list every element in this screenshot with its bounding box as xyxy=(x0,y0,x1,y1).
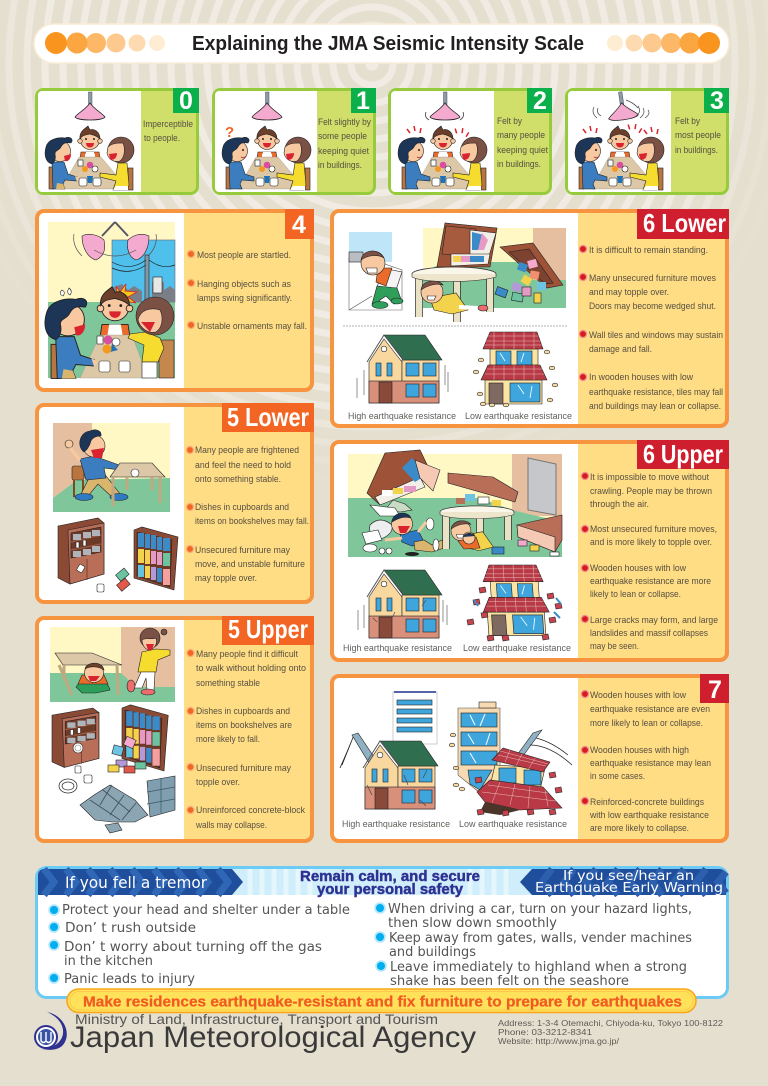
heading: Explaining the JMA Seismic Intensity Scale xyxy=(192,32,584,55)
heading: remain calm: your personal safety xyxy=(317,882,463,898)
icon: left orange dots xyxy=(45,32,165,54)
description bullets: landslides and massif collapses xyxy=(590,628,708,638)
illustration: person thrown, furniture toppled xyxy=(348,450,562,641)
panel: intensity 5 upper xyxy=(37,614,314,841)
description bullets: Wall tiles and windows may sustain xyxy=(589,330,723,340)
description bullets: items on bookshelves are xyxy=(196,720,292,730)
title banner xyxy=(34,24,729,63)
panel: intensity 0 xyxy=(36,87,199,194)
list: early warning xyxy=(374,902,692,989)
badge: 0: 0 xyxy=(179,87,193,115)
panel: intensity 3 xyxy=(566,87,729,194)
illustration: family at table with question mark: ? xyxy=(225,124,234,141)
description bullets: may be seen. xyxy=(590,641,639,651)
list: early warning: Leave immediately to highland when a strong xyxy=(390,960,687,975)
description xyxy=(318,117,371,170)
description bullets: Most people are startled. xyxy=(197,250,291,260)
description: most people xyxy=(675,130,721,140)
text: contact details: Phone: 03-3212-8341 xyxy=(498,1027,592,1037)
description bullets: Wooden houses with low xyxy=(590,563,686,573)
badge: 1: 1 xyxy=(356,87,370,115)
panel: intensity 4 xyxy=(37,209,314,390)
description: Felt slightly by xyxy=(318,117,371,127)
description bullets: Unreinforced concrete-block xyxy=(196,805,305,815)
list: early warning: shake has been felt on the seashore xyxy=(390,974,629,989)
description bullets: to walk without holding onto xyxy=(196,663,306,673)
description bullets xyxy=(579,245,723,411)
description bullets: Unsecured furniture may xyxy=(195,545,290,555)
description: in buildings. xyxy=(497,159,541,169)
panel: safety advice xyxy=(36,868,728,998)
arrow: early warning: Earthquake Early Warning xyxy=(535,880,723,896)
description bullets: topple over. xyxy=(196,777,240,787)
description: in buildings. xyxy=(318,160,362,170)
header band xyxy=(38,868,726,898)
description bullets: Most unsecured furniture moves, xyxy=(590,524,717,534)
description bullets: In wooden houses with low xyxy=(589,372,693,382)
arrow: if you felt a tremor: If you fell a tremor xyxy=(65,873,207,892)
badge: 7: 7 xyxy=(708,676,722,704)
badge: 3: 3 xyxy=(710,87,724,115)
arrow: early warning xyxy=(520,868,726,896)
caption: low resistance: Low earthquake resistance xyxy=(459,819,567,829)
description bullets: It is impossible to move without xyxy=(590,472,709,482)
description: Felt by xyxy=(675,116,700,126)
description bullets: onto something stable. xyxy=(195,474,281,484)
description bullets: earthquake resistance, tiles may fall xyxy=(589,387,723,397)
badge: 7 xyxy=(700,674,729,704)
description bullets xyxy=(187,250,307,331)
description bullets: Dishes in cupboards and xyxy=(195,502,289,512)
description xyxy=(675,116,721,155)
heading: remain calm xyxy=(300,869,480,898)
illustration: family at table, lamp swinging xyxy=(575,90,664,190)
caption: high resistance: High earthquake resistance xyxy=(342,819,450,829)
list: early warning: Keep away from gates, walls, vender machines xyxy=(389,931,692,946)
description bullets: Dishes in cupboards and xyxy=(196,706,290,716)
list: early warning: then slow down smoothly xyxy=(388,916,557,931)
badge: 2: 2 xyxy=(533,87,547,115)
list: if you felt a tremor: Protect your head and shelter under a table xyxy=(62,903,350,918)
badge: 2 xyxy=(527,87,552,115)
description: Felt by xyxy=(497,116,522,126)
list: if you felt a tremor: Don’ t rush outside xyxy=(65,921,196,936)
description: some people xyxy=(318,131,367,141)
description bullets: Many unsecured furniture moves xyxy=(589,273,716,283)
badge: 5 Lower: 5 Lower xyxy=(227,402,309,432)
panel: intensity 1 xyxy=(214,87,376,194)
description bullets: move, and unstable furniture xyxy=(195,559,305,569)
description: keeping quiet xyxy=(318,146,369,156)
description bullets: more likely to lean or collapse. xyxy=(590,718,703,728)
description bullets: damage and fall. xyxy=(589,344,652,354)
description bullets: and is more likely to topple over. xyxy=(590,537,712,547)
callout: make residences earthquake-resistant xyxy=(67,989,696,1012)
caption: high resistance: High earthquake resistance xyxy=(348,411,456,421)
description bullets: Doors may become wedged shut. xyxy=(589,301,716,311)
heading: remain calm: Remain calm, and secure xyxy=(300,869,480,885)
description xyxy=(497,116,548,169)
description bullets: Hanging objects such as xyxy=(197,279,291,289)
description bullets: more likely to fall. xyxy=(196,734,260,744)
illustration: man holding table xyxy=(53,423,178,592)
description bullets: something stable xyxy=(196,678,260,688)
icon: JMA logo xyxy=(34,1012,67,1050)
caption: high resistance: High earthquake resistance xyxy=(343,643,452,653)
description bullets: Unsecured furniture may xyxy=(196,763,291,773)
text: contact details: Website: http://www.jma.go.jp/ xyxy=(498,1036,620,1046)
description bullets: are more likely to collapse. xyxy=(590,823,689,833)
caption: low resistance: Low earthquake resistance xyxy=(465,411,572,421)
description bullets: with low earthquake resistance xyxy=(589,810,709,820)
description bullets: and buildings may lean or collapse. xyxy=(589,401,721,411)
description xyxy=(143,119,193,143)
arrow: if you felt a tremor xyxy=(38,869,243,895)
badge: 0 xyxy=(173,87,199,115)
illustration: kid at sink and furniture toppling xyxy=(343,223,567,407)
description: to people. xyxy=(144,133,180,143)
description: keeping quiet xyxy=(497,145,548,155)
description bullets: in some cases. xyxy=(590,771,645,781)
description bullets: through the air. xyxy=(590,499,649,509)
list: if you felt a tremor: Don’ t worry about turning off the gas xyxy=(64,940,322,955)
description bullets: and feel the need to hold xyxy=(195,460,291,470)
panel: intensity 6 upper xyxy=(332,439,729,660)
list: if you felt a tremor: in the kitchen xyxy=(64,954,153,969)
text: agency name: Japan Meteorological Agency xyxy=(70,1021,476,1054)
description: many people xyxy=(497,130,545,140)
caption: low resistance: Low earthquake resistance xyxy=(463,643,571,653)
illustration: family at table, lamp still xyxy=(45,92,134,190)
panel: intensity 6 lower xyxy=(332,208,729,426)
badge: 4: 4 xyxy=(292,211,306,239)
description: Imperceptible xyxy=(143,119,193,129)
description bullets xyxy=(186,445,309,583)
text: contact details xyxy=(498,1018,723,1046)
list: early warning: and buildings xyxy=(389,945,476,960)
icon: right orange dots xyxy=(607,32,720,54)
description bullets xyxy=(581,472,718,651)
description bullets: likely to lean or collapse. xyxy=(590,589,681,599)
description bullets: may topple over. xyxy=(195,573,257,583)
panel: intensity 7 xyxy=(332,674,729,841)
description bullets: Many people find it difficult xyxy=(196,649,298,659)
description bullets: earthquake resistance may lean xyxy=(590,758,711,768)
description bullets: Unstable ornaments may fall. xyxy=(197,321,307,331)
arrow: early warning: If you see/hear an xyxy=(563,868,694,884)
panel: intensity 2 xyxy=(390,87,552,194)
description bullets: earthquake resistance are more xyxy=(590,576,711,586)
description bullets: walls may collapse. xyxy=(195,820,267,830)
illustration: kid under table and woman at wall xyxy=(50,627,175,833)
description bullets: crawling. People may be thrown xyxy=(590,486,712,496)
description bullets: Reinforced-concrete buildings xyxy=(590,797,704,807)
description bullets: items on bookshelves may fall. xyxy=(195,516,309,526)
description bullets: Wooden houses with high xyxy=(590,745,689,755)
description bullets xyxy=(186,649,306,830)
callout: make residences earthquake-resistant: Make residences earthquake-resistant and fix furniture to prepare for earthquakes xyxy=(83,994,682,1010)
badge: 6 Lower: 6 Lower xyxy=(643,208,726,238)
badge: 5 Upper: 5 Upper xyxy=(228,614,308,644)
illustration: family at table, lamp slightly swinging xyxy=(398,92,487,190)
text: ministry name: Ministry of Land, Infrastructure, Transport and Tourism xyxy=(75,1011,438,1027)
description bullets: and may topple over. xyxy=(589,287,669,297)
description: in buildings. xyxy=(675,145,718,155)
description bullets: It is difficult to remain standing. xyxy=(589,245,708,255)
illustration: family at table with question mark xyxy=(222,92,311,190)
list: if you felt a tremor: Panic leads to injury xyxy=(64,972,195,987)
description bullets: earthquake resistance are even xyxy=(590,704,710,714)
list: if you felt a tremor xyxy=(48,903,350,987)
description bullets: Many people are frightened xyxy=(195,445,299,455)
description bullets: Wooden houses with low xyxy=(590,690,686,700)
description bullets: Large cracks may form, and large xyxy=(590,615,718,625)
panel: intensity 5 lower xyxy=(37,402,314,602)
illustration: startled family with swinging lamps xyxy=(45,222,175,378)
badge: 6 Upper: 6 Upper xyxy=(643,439,723,469)
text: contact details: Address: 1-3-4 Otemachi, Chiyoda-ku, Tokyo 100-8122 xyxy=(498,1018,723,1028)
list: early warning: When driving a car, turn on your hazard lights, xyxy=(388,902,692,917)
description bullets: lamps swing significantly. xyxy=(197,293,292,303)
badge: 4 xyxy=(285,209,314,239)
illustration: damaged buildings and collapsed house xyxy=(340,691,572,816)
description bullets xyxy=(581,690,711,833)
badge: 3 xyxy=(704,87,729,115)
badge: 1 xyxy=(351,87,376,115)
